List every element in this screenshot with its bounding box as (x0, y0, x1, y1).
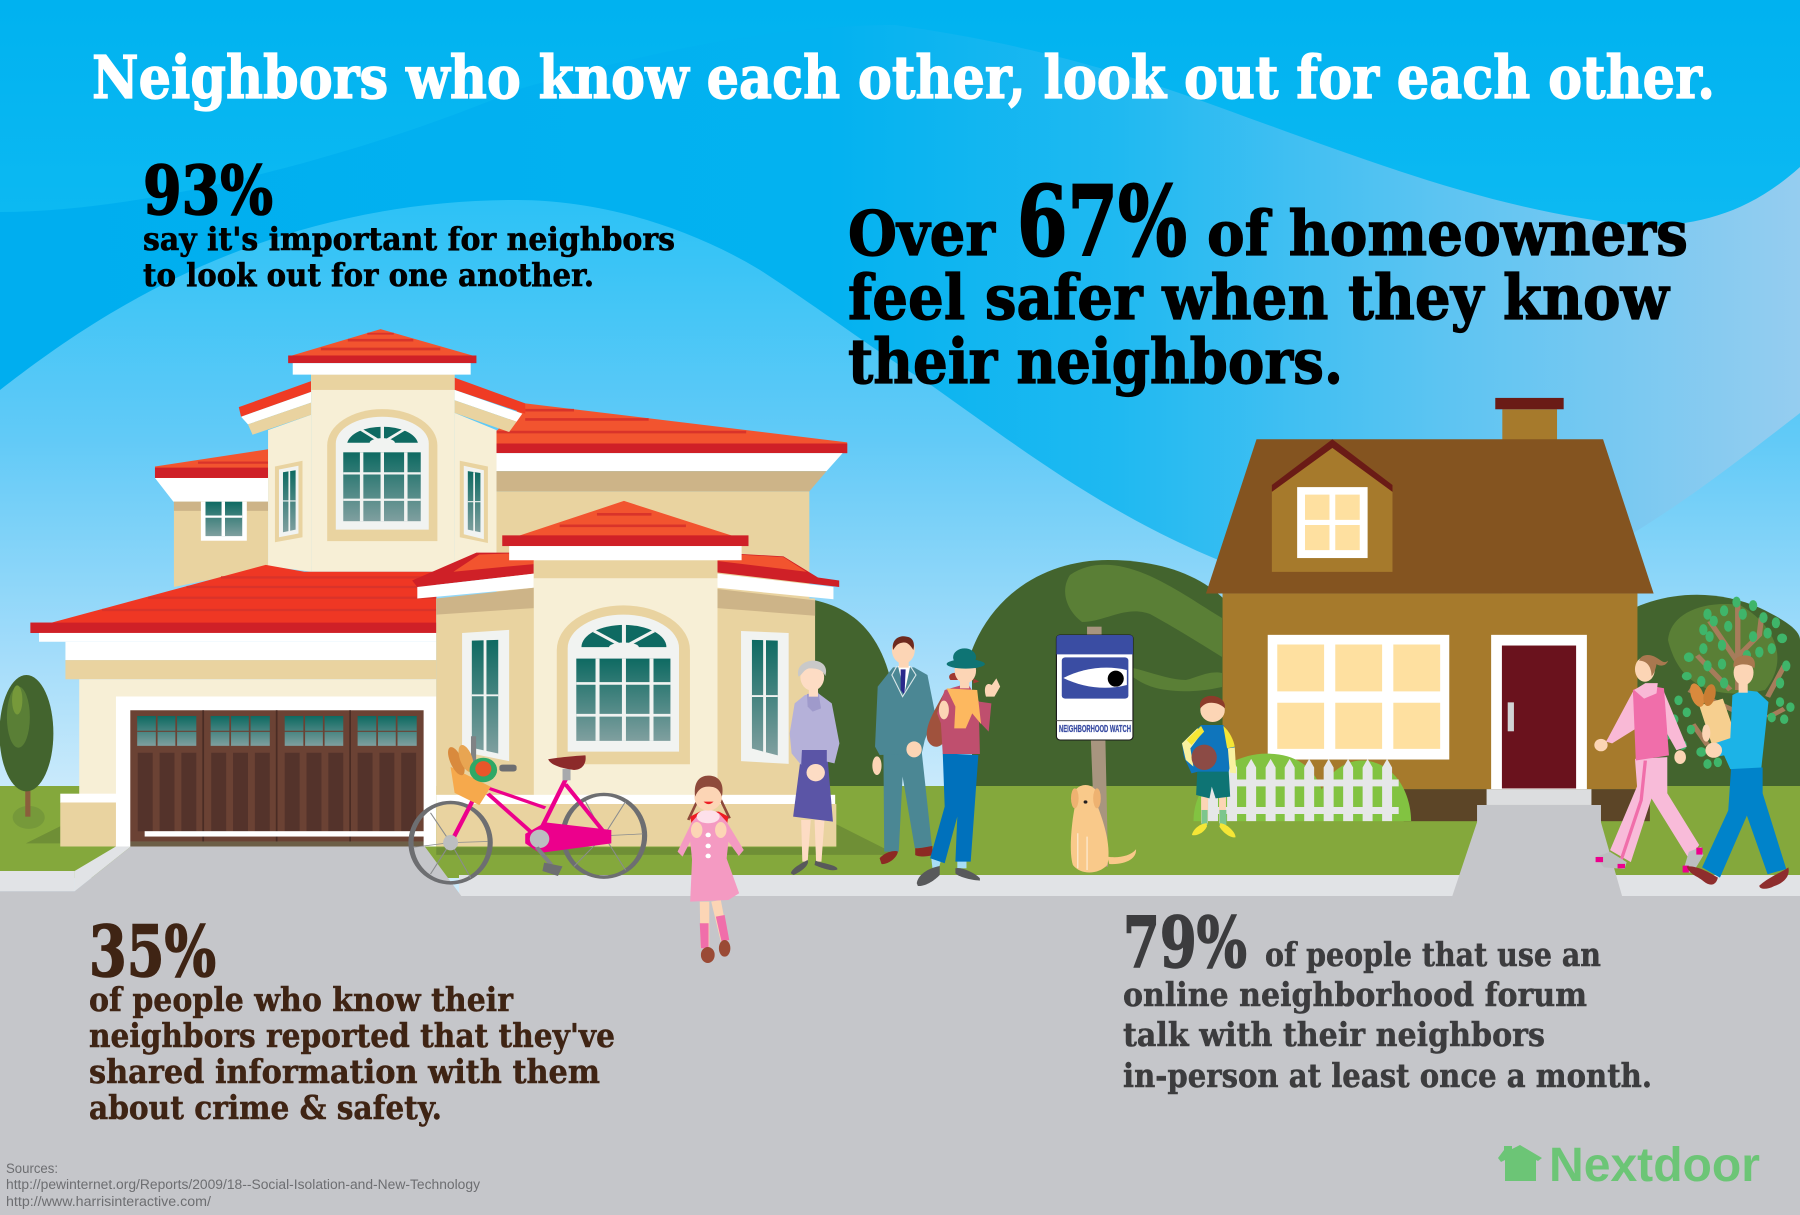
stat: 35%: neighbors reported that they've (89, 1016, 615, 1055)
man in blue with grocery bag (1687, 655, 1789, 889)
front bay wall (436, 599, 815, 805)
stat: 67%: 67% (1017, 165, 1187, 278)
stat: 35% (89, 910, 615, 1127)
sources (6, 1161, 480, 1209)
front bay centre (534, 560, 718, 796)
dormer (1272, 439, 1392, 572)
stat: 93% (143, 151, 675, 294)
icon: house (1498, 1145, 1542, 1181)
background hills (814, 560, 1800, 790)
left wing (155, 449, 268, 587)
large window (1268, 635, 1449, 760)
foundation (1404, 789, 1650, 821)
stat: 35%: about crime & safety. (89, 1088, 442, 1127)
garage door (130, 710, 425, 846)
stat: 79%: of people that use an (1265, 935, 1601, 974)
garage section (30, 565, 436, 846)
grass lawn (0, 786, 1800, 878)
nextdoor logo: Nextdoor (1549, 1139, 1760, 1192)
dog (1071, 785, 1136, 872)
rear wall (497, 491, 809, 683)
sources: http://pewinternet.org/Reports/2009/18--Social-Isolation-and-New-Technology (6, 1177, 480, 1192)
stat: 35%: 35% (89, 910, 216, 993)
bicycle (411, 736, 645, 883)
stat: 93%: to look out for one another. (143, 256, 594, 294)
sidewalk (459, 875, 1800, 896)
boy with basketball (1182, 696, 1236, 837)
driveway and left sidewalk (0, 840, 462, 900)
stat: 35%: shared information with them (89, 1052, 600, 1091)
sources: http://www.harrisinteractive.com/ (6, 1194, 211, 1209)
stat: 79%: talk with their neighbors (1123, 1015, 1545, 1054)
picket fence (1208, 759, 1399, 821)
large cream house with red roof (26, 329, 890, 855)
stat: 79% (1123, 901, 1652, 1095)
stat: 67%: their neighbors. (848, 325, 1343, 398)
stat: 67%: Over (848, 197, 996, 270)
woman in pink walking (1594, 655, 1703, 872)
tower arched window (327, 409, 437, 541)
sources: Sources: (6, 1161, 58, 1176)
girl (678, 776, 744, 963)
wall (1223, 594, 1637, 789)
stat: 93%: say it's important for neighbors (143, 220, 675, 258)
front gable roof (502, 501, 748, 560)
house base (436, 795, 835, 804)
door (1491, 635, 1587, 789)
stat: 79%: 79% (1123, 901, 1247, 984)
grandmother (790, 661, 839, 875)
ground shadows (26, 824, 890, 855)
tower top roof (288, 329, 476, 375)
stat: 93%: 93% (143, 151, 273, 230)
rear right roof (495, 403, 847, 491)
roof (1206, 439, 1654, 594)
background: light sky hill (0, 200, 1800, 900)
road (0, 896, 1800, 1215)
small brown house (1194, 398, 1654, 903)
tower centre (311, 375, 455, 572)
stat: 67%: feel safer when they know (848, 261, 1670, 334)
stat: 35%: of people who know their (89, 980, 514, 1019)
front side windows (462, 630, 789, 764)
bushes (1194, 754, 1411, 821)
stat: 79%: online neighborhood forum (1123, 975, 1587, 1014)
stat: 67% (848, 165, 1688, 398)
tree left (0, 675, 53, 829)
stat: 67%: of homeowners (1207, 197, 1688, 270)
steps and walkway (1452, 789, 1623, 903)
tower side windows (275, 461, 488, 543)
tower side roofs (239, 378, 525, 435)
front bay side roofs (412, 553, 839, 616)
sign label: NEIGHBORHOOD WATCH (1059, 724, 1131, 735)
neighborhood watch sign post (1087, 627, 1108, 867)
tree with green leaves (1664, 597, 1795, 769)
background: top wave (0, 0, 1800, 226)
stat: 79%: in-person at least once a month. (1123, 1056, 1652, 1095)
front arched window (557, 605, 690, 764)
chimney (1495, 398, 1564, 440)
tower side walls (268, 415, 311, 572)
background: sky ribbon (0, 0, 1800, 900)
woman with hat (917, 648, 1000, 886)
neighborhood watch sign (1056, 635, 1133, 740)
man in suit (872, 636, 935, 864)
